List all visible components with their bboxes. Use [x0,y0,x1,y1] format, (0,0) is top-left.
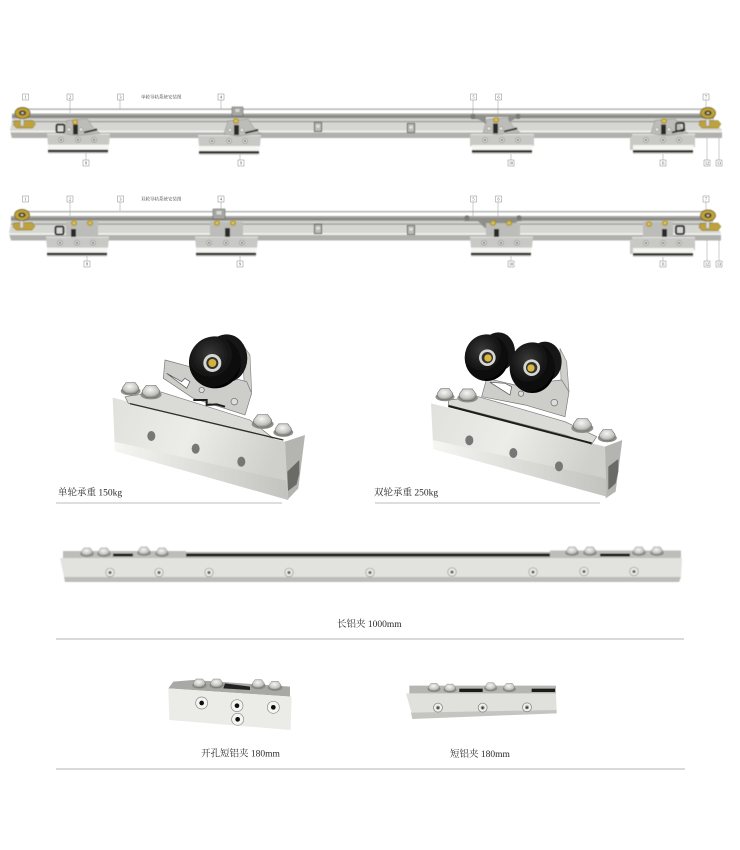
part number callouts: 10 [509,160,513,166]
part number callouts: 13 [717,160,721,166]
caption: long clamp: 长铝夹 1000mm [337,618,402,630]
clips and connectors [213,209,522,234]
part number callouts: 4 [220,196,222,202]
clips and connectors [232,107,520,132]
part number callouts: 2 [69,196,71,202]
part number callouts: 11 [661,160,665,166]
diagram: single-wheel track system [10,94,722,166]
part number callouts: 7 [705,196,707,202]
part number callouts [22,94,722,166]
part number callouts: 9 [239,262,241,266]
carriages and clamps [47,117,695,155]
caption: single wheel load: 单轮承重 150kg [58,486,122,498]
divider: long clamp [56,638,684,640]
part number callouts: 3 [120,196,122,202]
diagram: double-wheel track system [9,196,722,267]
part number callouts: 12 [705,262,709,266]
part number callouts: 1 [24,196,26,202]
track rail [10,108,722,138]
part number callouts: 11 [661,262,665,266]
left end stop [14,108,36,128]
divider: short clamps [56,768,685,770]
part number callouts: 7 [705,94,707,100]
part number callouts: 10 [509,262,513,266]
divider: double [375,502,600,504]
track rail [9,211,721,240]
caption: double wheel load: 双轮承重 250kg [374,486,438,498]
part number callouts [22,196,722,267]
product photo: double wheel carriage [431,332,622,498]
part number callouts: 6 [498,94,500,100]
part number callouts: 4 [220,94,222,100]
caption: short clamp: 短铝夹 180mm [450,748,511,760]
product photo: perforated short clamp [168,679,292,730]
left end stop [13,210,35,230]
part number callouts: 5 [472,196,474,202]
part number callouts: 9 [240,160,242,166]
part number callouts: 6 [498,196,500,202]
product photo: single wheel carriage [113,334,305,500]
part number callouts: 2 [69,94,71,100]
part number callouts: 8 [86,262,88,266]
part number callouts: 5 [472,94,474,100]
part number callouts: 12 [705,160,709,166]
right end stop [699,108,721,128]
divider: single [56,502,282,504]
part number callouts: 13 [717,262,721,266]
diagram title: single wheel: 单轮导轨系统安装图 [141,94,182,100]
right end stop [699,210,721,230]
part number callouts: 1 [24,94,26,100]
diagram title: double wheel: 双轮导轨系统安装图 [141,196,182,202]
carriages and clamps [46,220,695,257]
part number callouts: 3 [120,94,122,100]
product photo: short clamp [406,683,557,719]
product photo: long aluminium clamp [60,547,682,582]
part number callouts: 8 [85,160,87,166]
caption: perforated short clamp: 开孔短铝夹 180mm [201,748,281,760]
